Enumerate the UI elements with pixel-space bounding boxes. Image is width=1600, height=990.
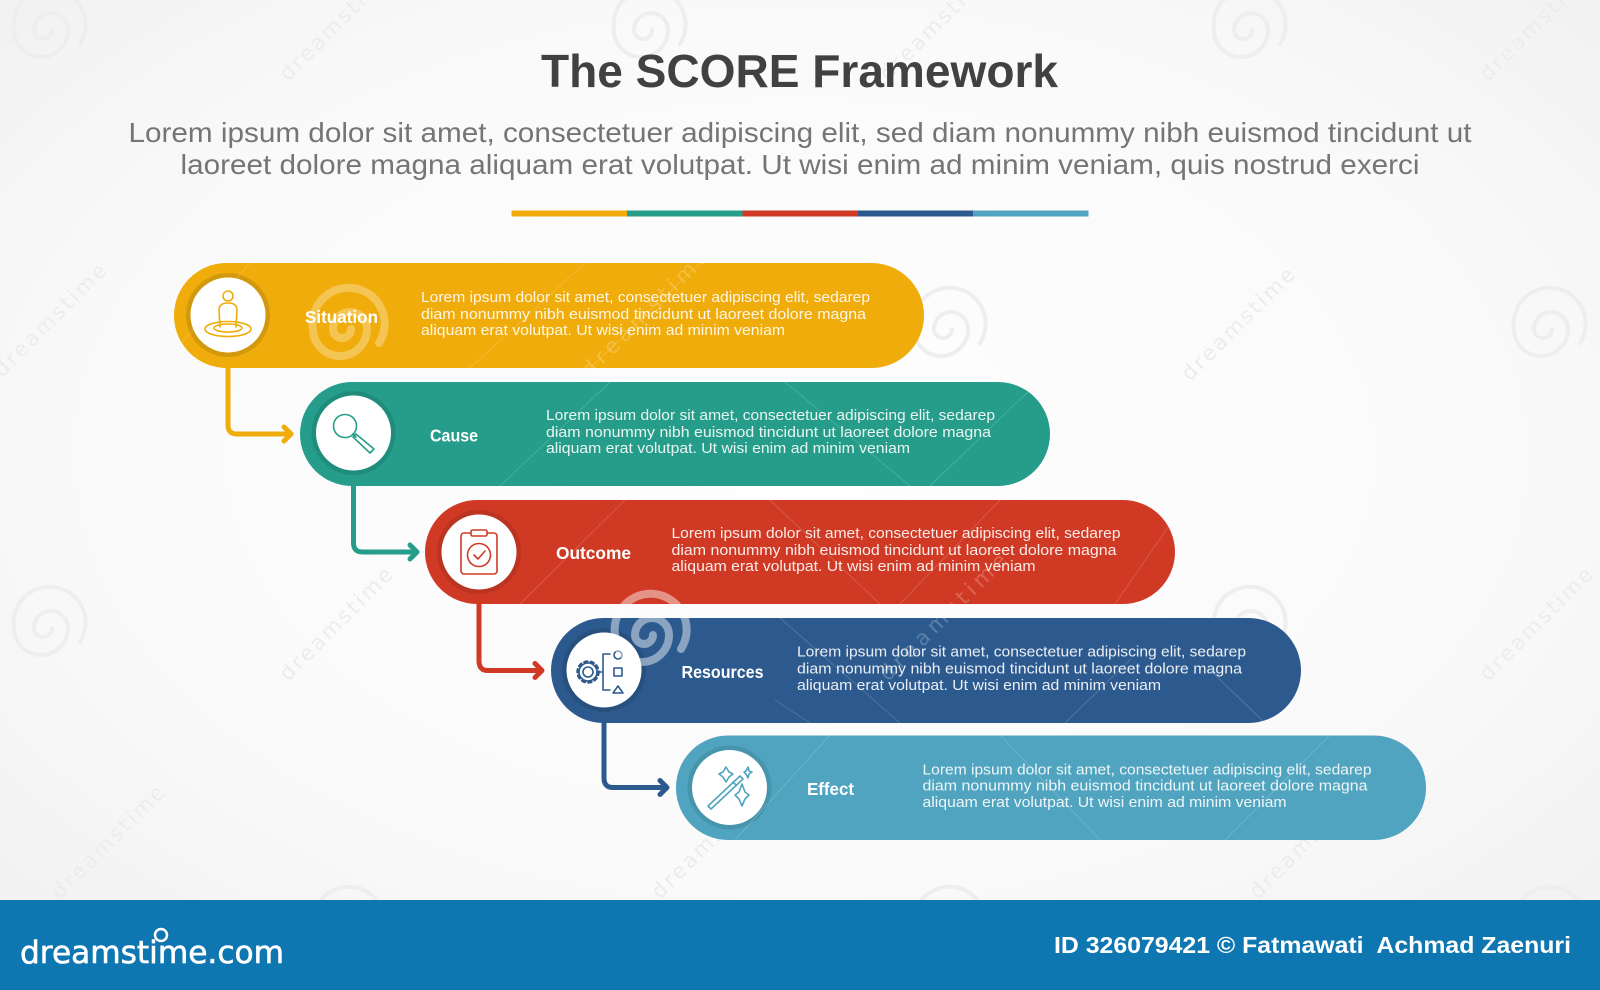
icon: person on target xyxy=(205,291,251,336)
foreground watermark: dreamstime xyxy=(875,548,1012,686)
label: outcome: Outcome xyxy=(556,543,631,563)
description: cause xyxy=(546,407,995,457)
label: effect: Effect xyxy=(807,779,854,799)
description: resources: diam nonummy nibh euismod tincidunt ut laoreet dolore magna xyxy=(797,660,1243,678)
panel: situation xyxy=(174,263,924,368)
footer bar xyxy=(0,900,1600,990)
credit: ID 326079421 © Fatmawati Achmad Zaenuri xyxy=(1054,932,1571,958)
panel: resources xyxy=(551,618,1301,723)
logo: dreamstime: dreamstime.com xyxy=(20,935,284,971)
arrow: cause to outcome xyxy=(354,484,417,559)
subtitle: laoreet dolore magna aliquam erat volutpat. Ut wisi enim ad minim veniam, quis nostrud exerci xyxy=(180,149,1420,180)
colored divider xyxy=(512,210,1088,216)
description: outcome: Lorem ipsum dolor sit amet, consectetuer adipiscing elit, sedarep xyxy=(672,525,1120,542)
background watermark: dreamstime xyxy=(1475,562,1598,686)
background watermark: dreamstime xyxy=(47,780,170,904)
background watermark: dreamstime xyxy=(647,780,770,904)
background watermark: dreamstime xyxy=(1177,262,1300,386)
icon: magnifying glass xyxy=(334,414,374,453)
panel: outcome xyxy=(425,500,1175,604)
description: cause: Lorem ipsum dolor sit amet, consectetuer adipiscing elit, sedarep xyxy=(546,407,995,424)
description: cause: diam nonummy nibh euismod tincidunt ut laoreet dolore magna xyxy=(546,424,992,441)
description: effect: Lorem ipsum dolor sit amet, consectetuer adipiscing elit, sedarep xyxy=(922,762,1372,778)
label: situation: Situation xyxy=(305,307,378,327)
description: effect xyxy=(922,762,1372,811)
description: outcome: diam nonummy nibh euismod tincidunt ut laoreet dolore magna xyxy=(672,542,1117,559)
description: effect: diam nonummy nibh euismod tincidunt ut laoreet dolore magna xyxy=(922,778,1368,794)
description: resources: aliquam erat volutpat. Ut wisi enim ad minim veniam xyxy=(797,677,1161,694)
subtitle: Lorem ipsum dolor sit amet, consectetuer adipiscing elit, sed diam nonummy nibh euismod tincidunt ut xyxy=(128,117,1472,148)
description: resources xyxy=(797,644,1246,694)
arrow: outcome to resources xyxy=(479,602,542,678)
title: The SCORE Framework xyxy=(541,45,1058,97)
background watermark: dreamstime xyxy=(275,562,398,686)
icon: magic wand xyxy=(708,767,752,809)
icon: clipboard check xyxy=(461,530,497,574)
subtitle xyxy=(128,117,1472,180)
description: resources: Lorem ipsum dolor sit amet, consectetuer adipiscing elit, sedarep xyxy=(797,644,1246,660)
description: situation xyxy=(421,289,870,339)
panel: effect xyxy=(676,736,1426,840)
background watermark: dreamstime xyxy=(1245,780,1368,904)
panel: cause xyxy=(300,382,1050,486)
description: outcome xyxy=(672,525,1120,575)
description: effect: aliquam erat volutpat. Ut wisi enim ad minim veniam xyxy=(922,794,1286,811)
description: cause: aliquam erat volutpat. Ut wisi enim ad minim veniam xyxy=(546,440,910,457)
foreground watermark xyxy=(160,244,1330,840)
foreground watermark: dreamstime xyxy=(577,244,714,382)
label: cause: Cause xyxy=(430,426,478,446)
arrow: situation to cause xyxy=(228,366,291,441)
description: outcome: aliquam erat volutpat. Ut wisi enim ad minim veniam xyxy=(672,558,1036,575)
icon: gear and shapes xyxy=(578,651,623,693)
description: situation: Lorem ipsum dolor sit amet, consectetuer adipiscing elit, sedarep xyxy=(421,289,870,306)
arrow: resources to effect xyxy=(604,721,667,794)
label: resources: Resources xyxy=(682,662,764,682)
description: situation: aliquam erat volutpat. Ut wisi enim ad minim veniam xyxy=(421,322,785,339)
description: situation: diam nonummy nibh euismod tincidunt ut laoreet dolore magna xyxy=(421,306,867,323)
